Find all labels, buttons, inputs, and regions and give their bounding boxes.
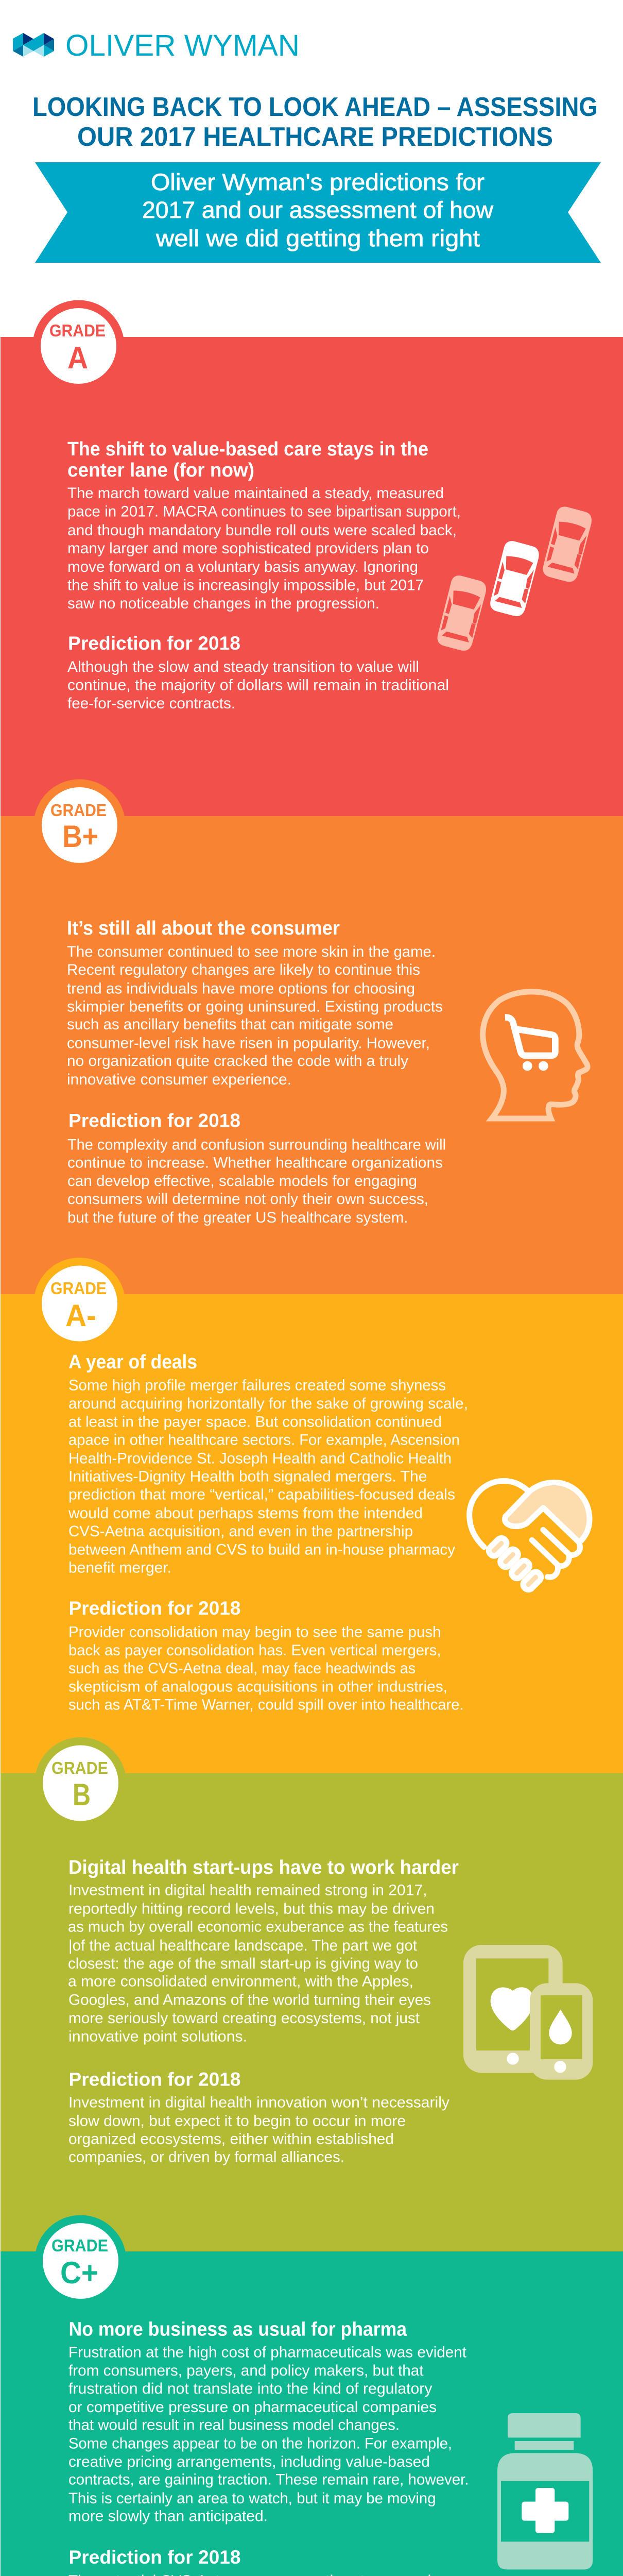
body text: assessment: Initiatives-Dignity Health both signaled mergers. The [68, 1468, 427, 1485]
body text: assessment [67, 485, 461, 612]
body text: prediction: skepticism of analogous acquisitions in other industries, [68, 1679, 447, 1696]
body text: prediction: companies, or driven by formal alliances. [68, 2148, 344, 2166]
subtitle text [142, 169, 494, 251]
heading: value-based care: center lane (for now) [67, 460, 254, 481]
heading: value-based care: The shift to value-based care stays in the [67, 438, 428, 460]
grade badge: B [35, 1737, 127, 1829]
subtitle text: well we did getting them right [155, 225, 480, 251]
grade badge: A-: A- [65, 1298, 96, 1333]
body text: prediction: Provider consolidation may begin to see the same push [68, 1624, 441, 1641]
grade badge: A [33, 300, 125, 392]
body text: assessment: benefit merger. [68, 1560, 171, 1577]
body text: assessment [68, 1377, 468, 1577]
body text: assessment: a more consolidated environment, with the Apples, [68, 1973, 413, 1990]
grade badge: B: GRADE [51, 1758, 108, 1777]
body text: assessment: that would result in real business model changes. [68, 2417, 400, 2434]
body text: prediction [67, 1137, 446, 1226]
body text: assessment: pace in 2017. MACRA continues to see bipartisan support, [67, 503, 461, 520]
body text: assessment: creative pricing arrangements, including value-based [68, 2453, 430, 2470]
body text: assessment: contracts, are gaining traction. These remain rare, however. [68, 2471, 469, 2488]
grade badge: C+ [35, 2215, 127, 2307]
body text: assessment: or competitive pressure on pharmaceutical companies [68, 2399, 437, 2416]
body text: assessment: no organization quite cracked the code with a truly [67, 1053, 408, 1070]
grade badge: C+: GRADE [51, 2236, 108, 2255]
body text: assessment: |of the actual healthcare landscape. The part we got [68, 1937, 418, 1954]
body text: assessment: around acquiring horizontally for the sake of growing scale, [68, 1395, 468, 1412]
body text: prediction: can develop effective, scalable models for engaging [67, 1173, 417, 1190]
grade badge: A- [34, 1258, 126, 1349]
body text: assessment: innovative point solutions. [68, 2028, 247, 2045]
grade badge: A: A [67, 341, 88, 375]
body text: assessment: Googles, and Amazons of the world turning their eyes [68, 1992, 431, 2009]
body text: assessment: would come about perhaps stems from the intended [68, 1505, 423, 1522]
body text: prediction: but the future of the greater US healthcare system. [67, 1209, 408, 1226]
body text: prediction: consumers will determine not only their own success, [67, 1191, 428, 1208]
body text: prediction: fee-for-service contracts. [67, 695, 235, 712]
icon: head with shopping cart [483, 992, 587, 1118]
body text: prediction: continue to increase. Whether healthcare organizations [67, 1155, 443, 1172]
body text: assessment: The march toward value maintained a steady, measured [67, 485, 444, 502]
body text: prediction: such as AT&T-Time Warner, could spill over into healthcare. [68, 1697, 463, 1714]
icon: tablet and phone [463, 1945, 593, 2080]
body text: assessment: Some changes appear to be on the horizon. For example, [68, 2435, 452, 2452]
body text: prediction [67, 658, 449, 712]
body text: assessment: between Anthem and CVS to build an in-house pharmacy [68, 1541, 455, 1558]
body text: assessment: from consumers, payers, and policy makers, but that [68, 2362, 424, 2379]
body text: assessment: Frustration at the high cost of pharmaceuticals was evident [68, 2344, 467, 2361]
grade badge: B+: GRADE [50, 801, 107, 820]
heading: prediction for 2018: Prediction for 2018 [69, 2069, 241, 2090]
heading: deals: A year of deals [68, 1351, 197, 1373]
body text: assessment: as much by overall economic exuberance as the features [68, 1919, 448, 1935]
body text: assessment: reportedly hitting record levels, but this may be driven [68, 1900, 435, 1917]
body text: assessment: apace in other healthcare sectors. For example, Ascension [68, 1432, 460, 1449]
ribbon banner: subtitle [35, 162, 601, 263]
body text: assessment [68, 2344, 469, 2525]
panel: grade A- [1, 1258, 623, 1773]
heading: consumer: It’s still all about the consumer [67, 918, 340, 939]
heading: prediction for 2018: Prediction for 2018 [68, 633, 240, 654]
icon: three cars [438, 506, 592, 651]
body text: assessment: Health-Providence St. Joseph Health and Catholic Health [68, 1450, 452, 1467]
body text: assessment: This is certainly an area to watch, but it may be moving [68, 2490, 436, 2507]
body text: assessment: the shift to value is increasingly impossible, but 2017 [67, 577, 424, 594]
body text: prediction: continue, the majority of dollars will remain in traditional [67, 677, 449, 693]
grade badge: B: B [73, 1777, 91, 1812]
title: OUR 2017 HEALTHCARE PREDICTIONS [77, 122, 553, 152]
body text: assessment: consumer-level risk have risen in popularity. However, [67, 1035, 430, 1052]
body text: prediction: such as the CVS-Aetna deal, may face headwinds as [68, 1660, 416, 1677]
title [32, 92, 598, 152]
body text: assessment: CVS-Aetna acquisition, and even in the partnership [68, 1523, 413, 1540]
heading: prediction for 2018: Prediction for 2018 [68, 1110, 240, 1131]
logo wordmark: OLIVER WYMAN [65, 29, 300, 62]
heading: prediction for 2018: Prediction for 2018 [69, 2547, 241, 2568]
grade badge: A: GRADE [49, 321, 106, 340]
body text: assessment: more seriously toward creating ecosystems, not just [68, 2010, 420, 2027]
body text: prediction: Investment in digital health innovation won’t necessarily [68, 2094, 449, 2111]
heading: pharma: No more business as usual for pharma [69, 2318, 407, 2340]
body text: assessment: Recent regulatory changes are likely to continue this [67, 961, 420, 978]
body text: prediction: back as payer consolidation has. Even vertical mergers, [68, 1642, 441, 1659]
body text: prediction: slow down, but expect it to begin to occur in more [68, 2112, 406, 2129]
body text: assessment: The consumer continued to see more skin in the game. [67, 943, 436, 960]
body text: assessment: trend as individuals have more options for choosing [67, 980, 415, 997]
body text: assessment: such as ancillary benefits that can mitigate some [67, 1016, 393, 1033]
panel: grade A [1, 300, 623, 816]
body text: prediction [68, 2094, 449, 2166]
body text: assessment: and though mandatory bundle roll outs were scaled back, [67, 522, 457, 539]
heading: digital health: Digital health start-ups have to work harder [68, 1857, 459, 1878]
body text: assessment: innovative consumer experience. [67, 1071, 291, 1088]
body text: assessment: prediction that more “vertical,” capabilities-focused deals [68, 1486, 455, 1503]
body text: assessment: frustration did not translate into the kind of regulatory [68, 2380, 432, 2397]
body text: assessment: Investment in digital health remained strong in 2017, [68, 1882, 427, 1899]
panel: grade B+ [1, 779, 623, 1294]
icon: handshake heart [470, 1481, 590, 1592]
body text: prediction: organized ecosystems, either within established [68, 2131, 394, 2147]
heading: prediction for 2018: Prediction for 2018 [69, 1598, 241, 1619]
body text: assessment: skimpier benefits or going uninsured. Existing products [67, 998, 443, 1015]
body text: prediction: Although the slow and steady transition to value will [67, 658, 419, 675]
grade badge: B+ [34, 779, 126, 871]
panel: grade B [1, 1737, 623, 2251]
body text: assessment [68, 1882, 448, 2045]
body text: assessment: at least in the payer space. But consolidation continued [68, 1414, 442, 1430]
body text: prediction [68, 1624, 463, 1714]
grade badge: A-: GRADE [50, 1279, 107, 1298]
subtitle text: Oliver Wyman's predictions for [151, 169, 484, 195]
body text: assessment: closest: the age of the small start-up is giving way to [68, 1955, 418, 1972]
body text: prediction: The complexity and confusion surrounding healthcare will [67, 1137, 446, 1153]
body text: assessment: more slowly than anticipated. [68, 2508, 268, 2525]
body text: assessment: move forward on a voluntary basis anyway. Ignoring [67, 558, 418, 575]
body text: assessment [67, 943, 443, 1088]
grade badge: B+: B+ [62, 819, 98, 854]
subtitle text: 2017 and our assessment of how [142, 197, 494, 223]
heading: value-based care [67, 438, 428, 481]
panel: grade C+ [1, 2215, 623, 2576]
body text: assessment: saw no noticeable changes in the progression. [67, 595, 379, 612]
body text: assessment: Some high profile merger failures created some shyness [68, 1377, 446, 1394]
icon: logo mark [13, 33, 54, 57]
icon: medicine bottle [497, 2413, 593, 2569]
body text: assessment: many larger and more sophisticated providers plan to [67, 540, 429, 557]
grade badge: C+: C+ [60, 2256, 98, 2290]
logo: Oliver Wyman [13, 29, 300, 62]
